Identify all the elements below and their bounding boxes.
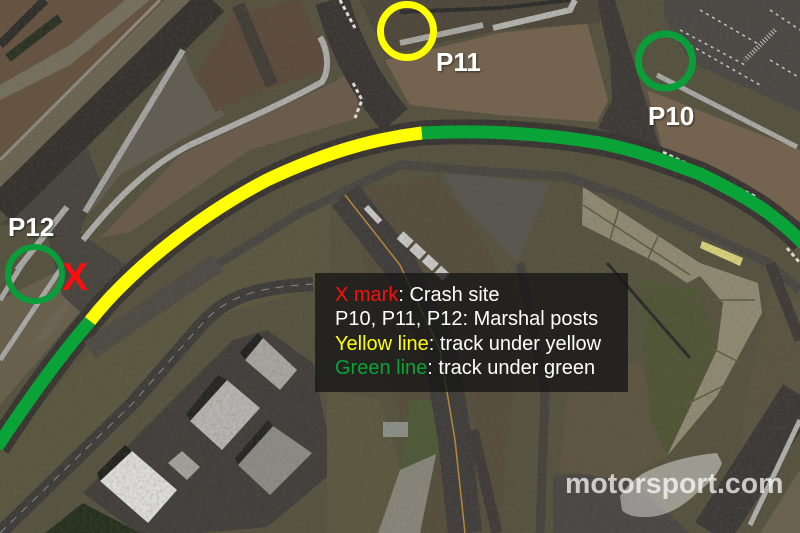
legend line: marshal posts: P10, P11, P12: Marshal posts [335, 308, 598, 330]
car park markings [680, 10, 800, 85]
buildings [97, 207, 446, 523]
watermark text: motorsport.com [565, 468, 784, 500]
watermark swoosh icon [620, 453, 722, 517]
label P10: P10 [648, 101, 694, 131]
legend line: green: Green line: track under green [335, 357, 595, 379]
upper green track section [422, 132, 800, 244]
marshal post P11 marker [380, 4, 434, 58]
legend line: crash site: X mark: Crash site [335, 284, 500, 306]
crash site X mark: X [62, 256, 88, 299]
motorsport.com watermark [565, 453, 784, 517]
marshal post P10 marker [638, 34, 692, 88]
label P12: P12 [8, 212, 54, 242]
label P11: P11 [436, 47, 481, 77]
marshal post P12 marker [8, 247, 62, 301]
grandstand [582, 187, 762, 456]
yellow track section [90, 133, 422, 321]
legend line: yellow: Yellow line: track under yellow [335, 333, 602, 355]
legend panel [315, 273, 628, 392]
lower green track section [0, 321, 90, 447]
track status line [0, 132, 800, 447]
